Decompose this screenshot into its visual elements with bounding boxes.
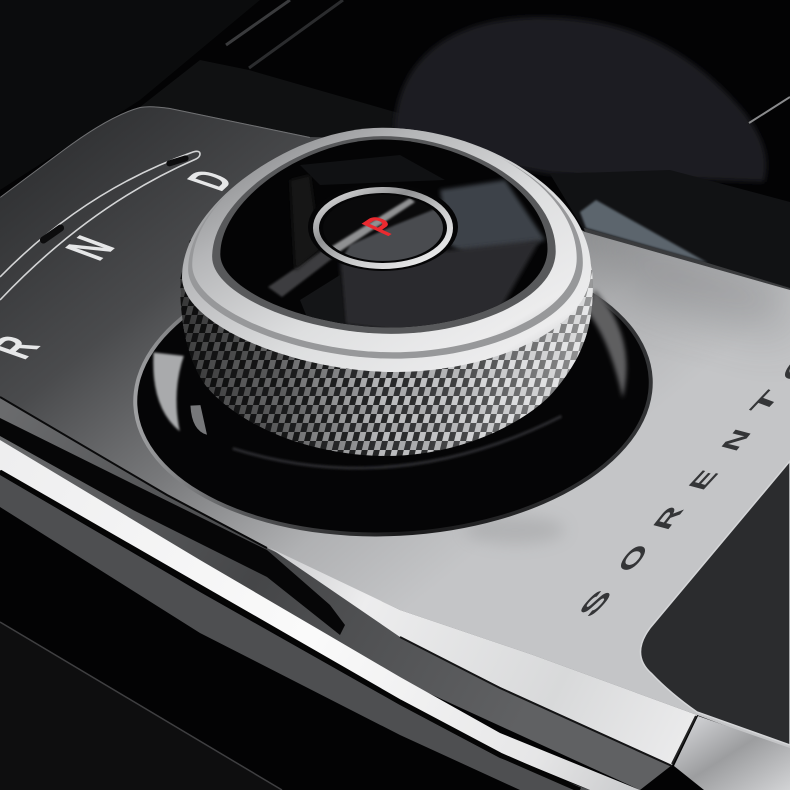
knob <box>180 128 593 456</box>
centre button <box>323 195 443 261</box>
black reflection band <box>0 418 345 635</box>
chrome top ring <box>182 128 591 372</box>
SORENTO wordmark: R <box>647 504 689 532</box>
gear letter D: D <box>175 164 245 196</box>
dark touch pad <box>640 461 790 745</box>
dial reflections <box>268 155 545 335</box>
shifter well <box>126 235 660 549</box>
well inner lip <box>232 416 564 475</box>
plate lower edge line <box>0 397 267 548</box>
SORENTO wordmark: T <box>745 387 786 417</box>
black glass dial <box>220 140 548 327</box>
lower-left leather area <box>0 622 282 790</box>
lower grey band <box>0 475 590 790</box>
upper trim lines <box>226 0 790 123</box>
bright chrome strip <box>0 440 640 790</box>
plate shading <box>0 106 790 544</box>
centre ring <box>308 183 458 271</box>
right chrome section <box>674 716 790 790</box>
gear track end capsule <box>166 155 189 167</box>
SORENTO wordmark: N <box>715 426 757 454</box>
chrome trim strips <box>0 395 697 790</box>
SORENTO wordmark <box>573 351 790 620</box>
well right reflections <box>585 288 628 400</box>
selected gear P: P <box>352 211 411 241</box>
SORENTO wordmark: E <box>683 468 724 493</box>
black separator line <box>0 472 580 790</box>
chrome curb along plate <box>270 548 697 765</box>
gear track arcs <box>0 151 200 300</box>
middle grey band <box>0 395 697 790</box>
well left reflections <box>153 351 188 432</box>
right console trim <box>550 170 790 296</box>
SORENTO wordmark: O <box>612 542 656 574</box>
gear letter N: N <box>52 229 128 266</box>
SORENTO wordmark: S <box>573 586 618 620</box>
knurled side band <box>180 240 593 456</box>
button reflections <box>326 198 445 262</box>
gear track mark <box>39 223 65 245</box>
cup holder dome <box>395 17 766 182</box>
curb lower dark line <box>400 637 672 766</box>
curb joint line <box>672 716 696 764</box>
